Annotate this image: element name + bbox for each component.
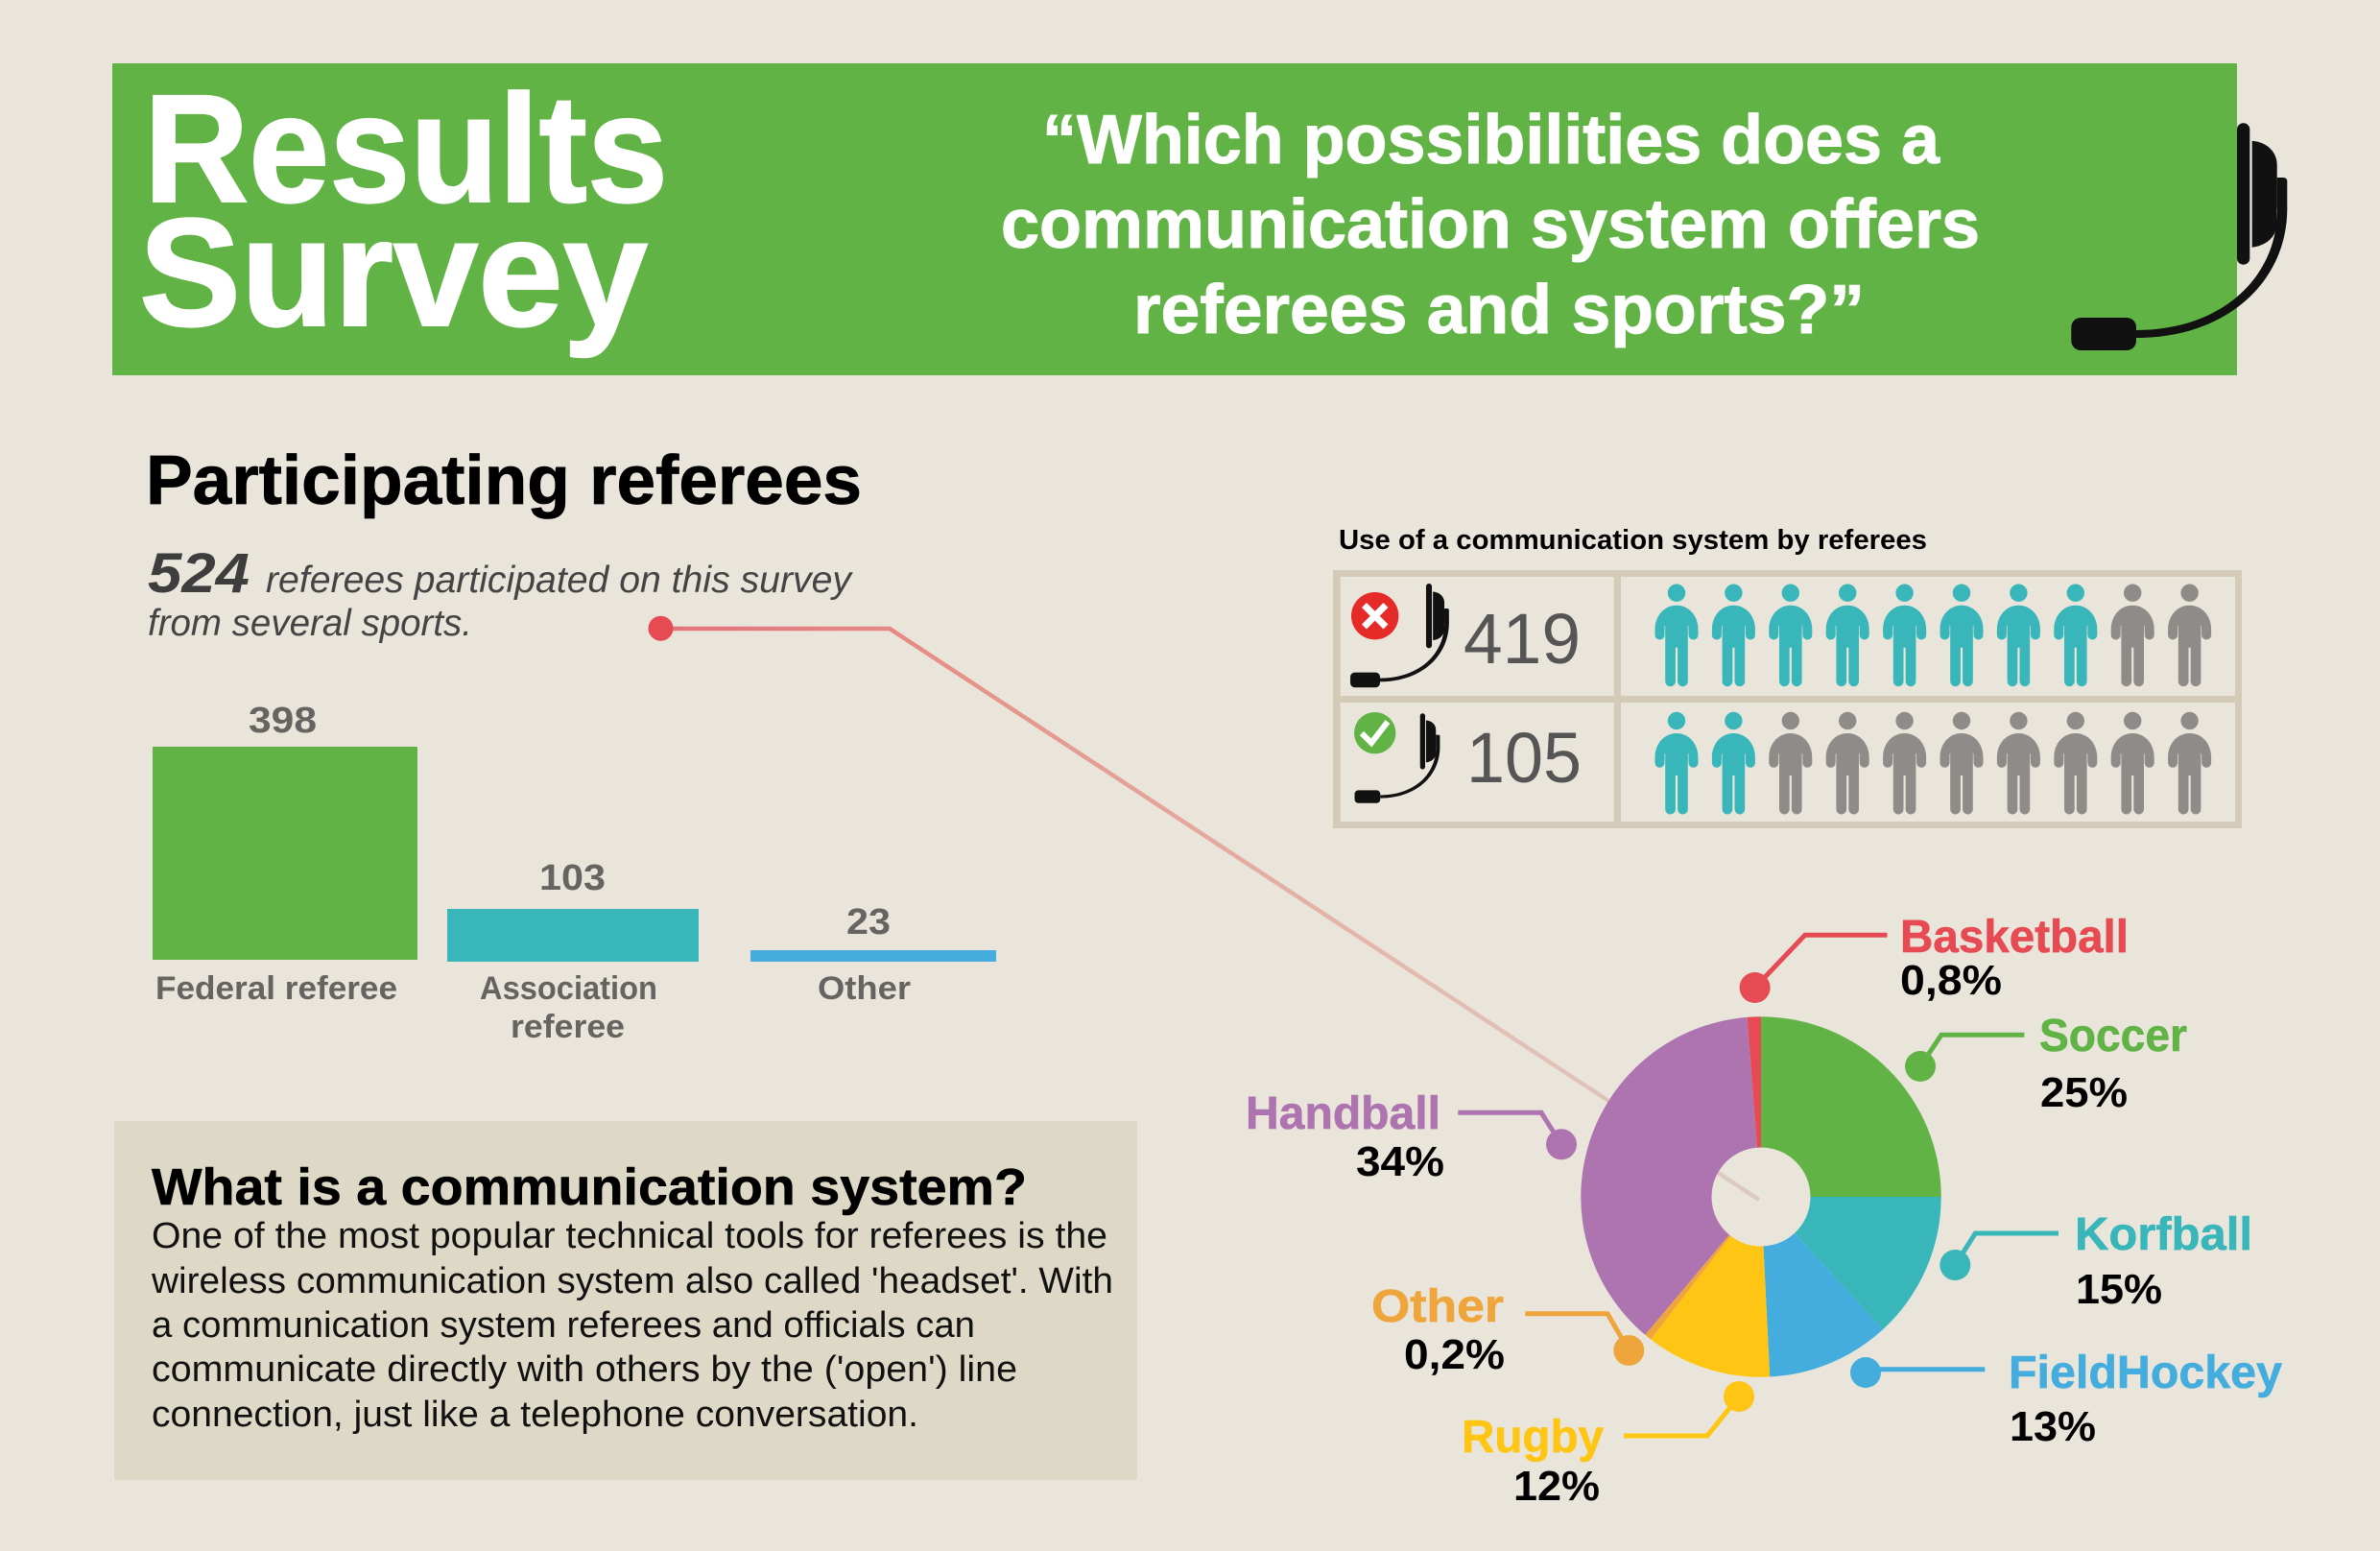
bar: association referee: Association bbox=[480, 970, 657, 1007]
slice: handball bbox=[1581, 1017, 1757, 1335]
bar: other: Other bbox=[818, 970, 911, 1007]
panel body text: communicate directly with others by the ('open') line bbox=[152, 1349, 1017, 1390]
survey question bbox=[1001, 102, 1980, 348]
people row: 2 of 10 teal bbox=[1654, 712, 2211, 814]
banner background bbox=[112, 63, 2237, 375]
bar: other bbox=[750, 902, 996, 1007]
text block: participants bbox=[148, 542, 854, 644]
panel body text: wireless communication system also called 'headset'. With bbox=[151, 1261, 1113, 1301]
pie label: other bbox=[1371, 1281, 1644, 1378]
pie label: korfball bbox=[1940, 1209, 2252, 1313]
pie label: korfball: Korfball bbox=[2075, 1209, 2252, 1260]
pie label: other: 0,2% bbox=[1404, 1331, 1505, 1378]
panel body text: a communication system referees and officials can bbox=[152, 1305, 975, 1346]
title: Results bbox=[144, 62, 668, 234]
icon: red cross bbox=[1351, 592, 1398, 639]
survey question: referees and sports?” bbox=[1133, 272, 1865, 348]
panel body text: One of the most popular technical tools for referees is the bbox=[152, 1216, 1107, 1256]
people row: 8 of 10 teal bbox=[1654, 584, 2211, 686]
pie label: rugby bbox=[1462, 1381, 1754, 1510]
slice: basketball bbox=[1748, 1016, 1761, 1148]
heading: use of a communication system: Use of a communication system by referees bbox=[1339, 525, 1927, 556]
slice: field hockey bbox=[1764, 1233, 1883, 1376]
bar: federal referee: Federal referee bbox=[155, 970, 397, 1007]
pie label: other: Other bbox=[1371, 1281, 1504, 1332]
icon: green check bbox=[1354, 712, 1395, 753]
text block: participants: 524 bbox=[148, 542, 250, 605]
icon: headset bbox=[2071, 123, 2287, 350]
number: 105: 105 bbox=[1466, 718, 1582, 798]
bar: association referee: 103 bbox=[539, 858, 606, 898]
pie label: basketball bbox=[1740, 912, 2129, 1004]
bar: association referee: referee bbox=[511, 1009, 625, 1045]
pie label: soccer: Soccer bbox=[2039, 1011, 2187, 1062]
panel: what is a communication system bbox=[114, 1121, 1137, 1480]
bar: other: 23 bbox=[846, 902, 891, 943]
icon: headset with system bbox=[1355, 713, 1440, 803]
heading: participating referees: Participating referees bbox=[146, 442, 862, 519]
text block: participants: from several sports. bbox=[148, 603, 472, 644]
panel body text bbox=[151, 1216, 1113, 1435]
pie chart: sports bbox=[1581, 1016, 1941, 1377]
title: Survey bbox=[139, 186, 648, 358]
number: 419: 419 bbox=[1464, 599, 1581, 679]
pie label: handball bbox=[1246, 1088, 1577, 1185]
pie label: rugby: 12% bbox=[1513, 1463, 1600, 1510]
text block: participants: referees participated on this survey bbox=[266, 560, 854, 601]
panel body text: connection, just like a telephone conversation. bbox=[152, 1395, 918, 1435]
slice: other bbox=[1645, 1234, 1731, 1340]
bar: association referee bbox=[447, 858, 699, 1045]
header banner bbox=[112, 62, 2287, 375]
pie label: handball: Handball bbox=[1246, 1088, 1440, 1139]
pie label: soccer: 25% bbox=[2040, 1069, 2128, 1116]
pie label: field hockey: FieldHockey bbox=[2009, 1348, 2282, 1398]
slice: soccer bbox=[1761, 1016, 1941, 1197]
pie label: korfball: 15% bbox=[2076, 1266, 2162, 1313]
slice: rugby bbox=[1651, 1236, 1770, 1377]
pie label: field hockey: 13% bbox=[2010, 1403, 2096, 1450]
bar: federal referee: 398 bbox=[249, 701, 317, 741]
pie label: handball: 34% bbox=[1356, 1138, 1444, 1185]
slice: korfball bbox=[1795, 1197, 1941, 1329]
pie label: soccer bbox=[1905, 1011, 2187, 1116]
pie label: field hockey bbox=[1850, 1348, 2282, 1450]
panel: communication system usage table bbox=[1333, 570, 2242, 828]
survey question: communication system offers bbox=[1001, 186, 1980, 263]
survey question: “Which possibilities does a bbox=[1042, 102, 1940, 179]
connector line from participants to pie chart bbox=[649, 616, 1759, 1200]
title bbox=[139, 62, 668, 358]
bar chart: referee types bbox=[153, 701, 996, 1045]
pie label: basketball: Basketball bbox=[1900, 912, 2129, 963]
pie label: rugby: Rugby bbox=[1462, 1412, 1604, 1463]
panel heading: What is a communication system? bbox=[152, 1158, 1027, 1216]
bar: federal referee bbox=[153, 701, 417, 1007]
icon: headset without system bbox=[1350, 584, 1449, 687]
pie label: basketball: 0,8% bbox=[1900, 957, 2002, 1004]
